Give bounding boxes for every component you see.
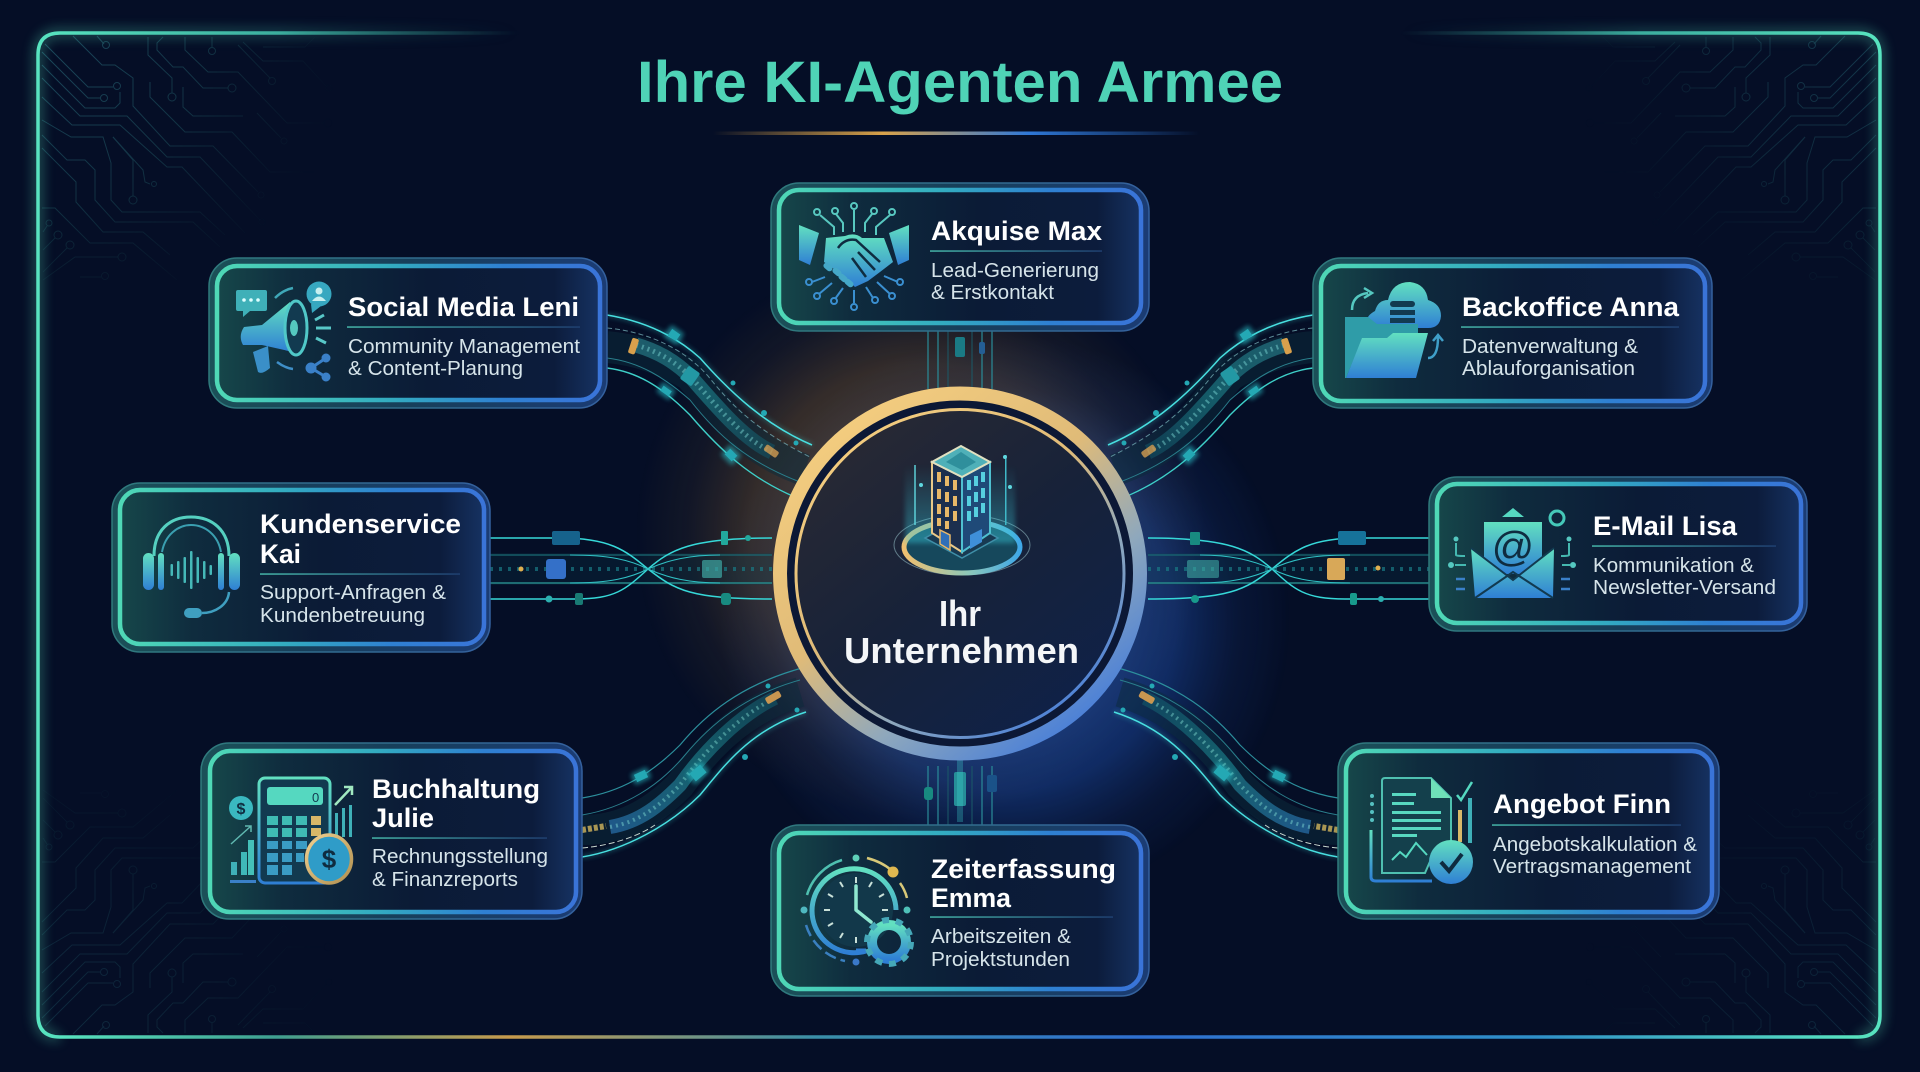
panel: Akquise Max xyxy=(771,183,1149,331)
card frame xyxy=(771,825,1149,996)
card description: Rechnungsstellung xyxy=(372,846,548,868)
panel: Zeiterfassung Emma xyxy=(771,825,1149,996)
card description: Angebotskalkulation & xyxy=(1493,834,1698,856)
card description xyxy=(372,846,548,891)
icon: clock and gear xyxy=(800,854,911,966)
card description: Kommunikation & xyxy=(1593,555,1755,577)
connector: Akquise Max xyxy=(928,329,992,389)
icon: calculator: 0 xyxy=(312,790,319,805)
card frame xyxy=(771,183,1149,331)
card title: Backoffice Anna xyxy=(1462,292,1680,322)
panel: Backoffice Anna xyxy=(1313,258,1712,408)
icon: headset xyxy=(143,517,240,618)
icon: megaphone xyxy=(236,282,332,380)
connector: E-Mail Lisa xyxy=(1148,531,1430,605)
connector: Backoffice Anna xyxy=(1108,315,1313,497)
card description: Lead-Generierung xyxy=(931,260,1099,282)
card frame xyxy=(201,743,582,919)
hub label: Unternehmen xyxy=(844,630,1079,671)
connector: Kundenservice Kai xyxy=(490,531,772,605)
connector: Social Media Leni xyxy=(607,315,812,497)
card description: Projektstunden xyxy=(931,949,1070,971)
card description: Support-Anfragen & xyxy=(260,582,447,604)
hub label xyxy=(844,593,1079,671)
card title: Kundenservice xyxy=(260,509,461,539)
panel: Buchhaltung Julie xyxy=(201,743,582,919)
card description xyxy=(348,336,580,380)
card description xyxy=(260,582,447,627)
card title: Akquise Max xyxy=(931,216,1102,246)
center glow xyxy=(635,250,1290,905)
card title: Angebot Finn xyxy=(1493,789,1671,819)
panel: Angebot Finn xyxy=(1338,743,1719,919)
card description: & Erstkontakt xyxy=(931,282,1054,304)
connector: Zeiterfassung Emma xyxy=(924,760,997,826)
icon: calculator: $ xyxy=(237,801,246,818)
card title: Julie xyxy=(372,803,434,833)
icon: calculator xyxy=(229,778,352,883)
central hub xyxy=(780,394,1140,754)
card frame xyxy=(1338,743,1719,919)
card description xyxy=(1493,834,1698,878)
card title: Buchhaltung xyxy=(372,774,540,804)
card description: Newsletter-Versand xyxy=(1593,577,1776,599)
connector: Buchhaltung Julie xyxy=(582,668,806,857)
icon: envelope xyxy=(1448,508,1576,598)
panel: E-Mail Lisa xyxy=(1429,477,1807,631)
title: Ihre KI-Agenten Armee xyxy=(637,50,1283,115)
hub ring xyxy=(780,394,1140,754)
title underline xyxy=(712,132,1200,135)
card title: Emma xyxy=(931,883,1012,913)
card description xyxy=(1593,555,1776,599)
card frame xyxy=(1313,258,1712,408)
card description: Arbeitszeiten & xyxy=(931,926,1072,948)
card title: E-Mail Lisa xyxy=(1593,511,1738,541)
card title: Kai xyxy=(260,539,301,569)
card description: Vertragsmanagement xyxy=(1493,856,1691,878)
icon: calculator: $ xyxy=(322,844,337,874)
card description: Ablauforganisation xyxy=(1462,358,1635,380)
card frame xyxy=(112,483,490,652)
connector: Angebot Finn xyxy=(1114,668,1338,857)
card description: Kundenbetreuung xyxy=(260,605,425,627)
card frame xyxy=(1429,477,1807,631)
icon: handshake xyxy=(799,203,909,310)
card title xyxy=(260,509,461,569)
card title xyxy=(931,854,1116,913)
icon: cloud and folder xyxy=(1345,282,1443,378)
icon: document and check xyxy=(1370,778,1473,884)
card description: Community Management xyxy=(348,336,580,358)
hub label: Ihr xyxy=(939,593,981,634)
panel: Social Media Leni xyxy=(209,258,607,408)
card title: Zeiterfassung xyxy=(931,854,1116,884)
card frame xyxy=(209,258,607,408)
card description xyxy=(931,260,1099,304)
card description xyxy=(1462,336,1639,380)
card description xyxy=(931,926,1072,971)
card title xyxy=(372,774,540,833)
card description: & Finanzreports xyxy=(372,869,518,891)
icon: envelope: @ xyxy=(1492,523,1534,570)
card description: Datenverwaltung & xyxy=(1462,336,1639,358)
card description: & Content-Planung xyxy=(348,358,523,380)
card title: Social Media Leni xyxy=(348,292,579,322)
panel: Kundenservice Kai xyxy=(112,483,490,652)
icon: building xyxy=(894,446,1030,575)
